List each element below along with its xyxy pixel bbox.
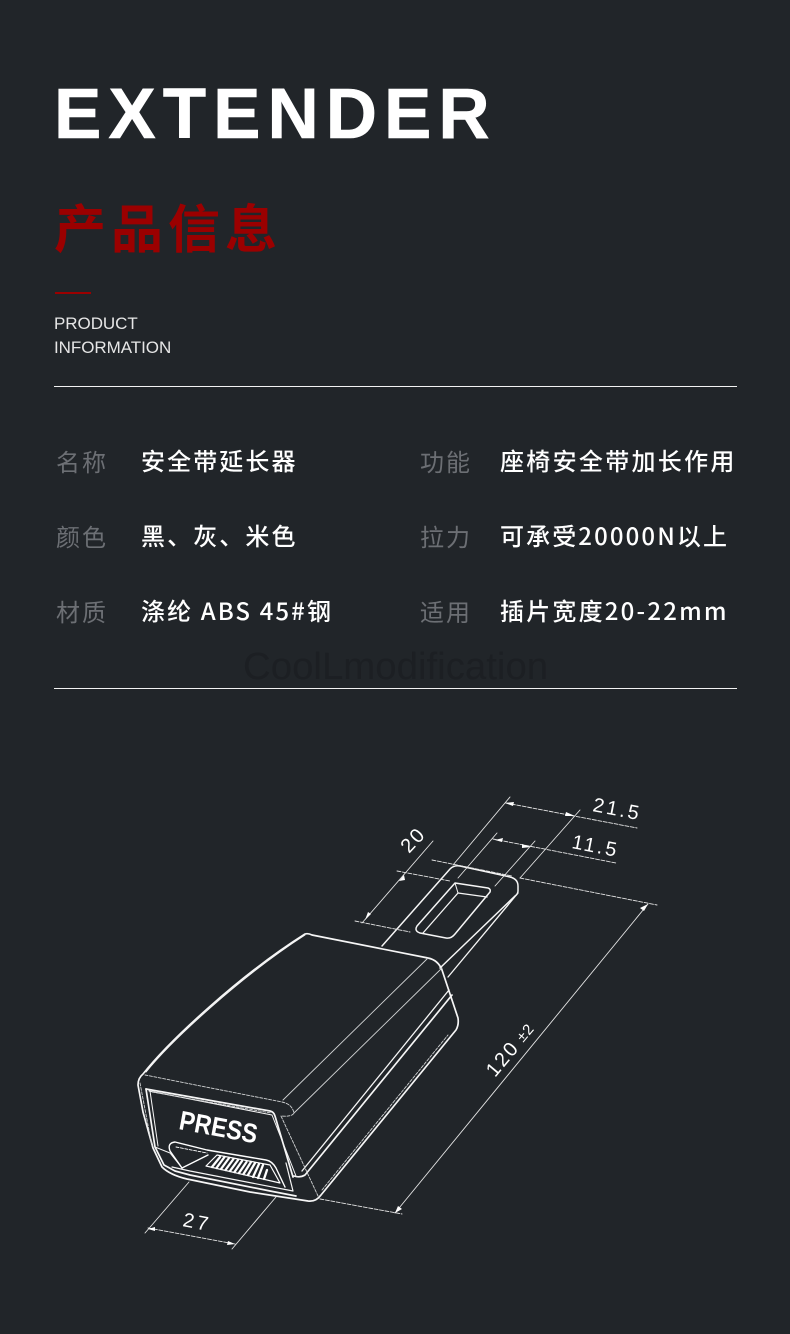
value: tensile strength: 可承受20000N以上 (500, 517, 729, 552)
value: color: 黑、灰、米色 (141, 517, 298, 552)
value: function: 座椅安全带加长作用 (500, 442, 737, 477)
label: applicable: 适用 (420, 593, 472, 628)
dimension: 27: 27 (181, 1209, 213, 1236)
label: material: 材质 (56, 593, 108, 628)
label: tensile strength: 拉力 (420, 518, 472, 553)
red accent line (55, 292, 91, 294)
subtitle: product information (54, 314, 171, 357)
title: EXTENDER: EXTENDER (54, 75, 497, 154)
dimension: 11.5: 11.5 (570, 831, 621, 862)
dimension: 120 ±2: ±2 (513, 1020, 538, 1045)
dimension lines (145, 797, 657, 1249)
dimension: 20: 20 (397, 823, 431, 857)
buckle body outline (138, 934, 458, 1201)
label: name: 名称 (56, 443, 108, 478)
label: function: 功能 (420, 443, 472, 478)
heading: 产品信息: 产品信息 (54, 202, 282, 260)
dimension: 120 ±2 (482, 1018, 540, 1081)
dimension: 120 ±2: 120 (482, 1037, 524, 1081)
watermark: CoolLmodification (243, 645, 548, 688)
value: applicable: 插片宽度20-22mm (500, 592, 729, 627)
slot and teeth (169, 1142, 285, 1187)
label: color: 颜色 (56, 518, 108, 553)
value: material: 涤纶 ABS 45#钢 (141, 592, 333, 627)
belt tab (382, 866, 518, 977)
panel: product specs (56, 442, 737, 628)
value: name: 安全带延长器 (141, 442, 298, 477)
buckle faint edges (140, 958, 448, 1196)
subtitle: product information: PRODUCT (54, 314, 138, 333)
PRESS label: PRESS (177, 1105, 260, 1149)
subtitle: product information: INFORMATION (54, 338, 171, 357)
dimension arrows (148, 802, 648, 1245)
dimension: 21.5: 21.5 (591, 794, 643, 825)
